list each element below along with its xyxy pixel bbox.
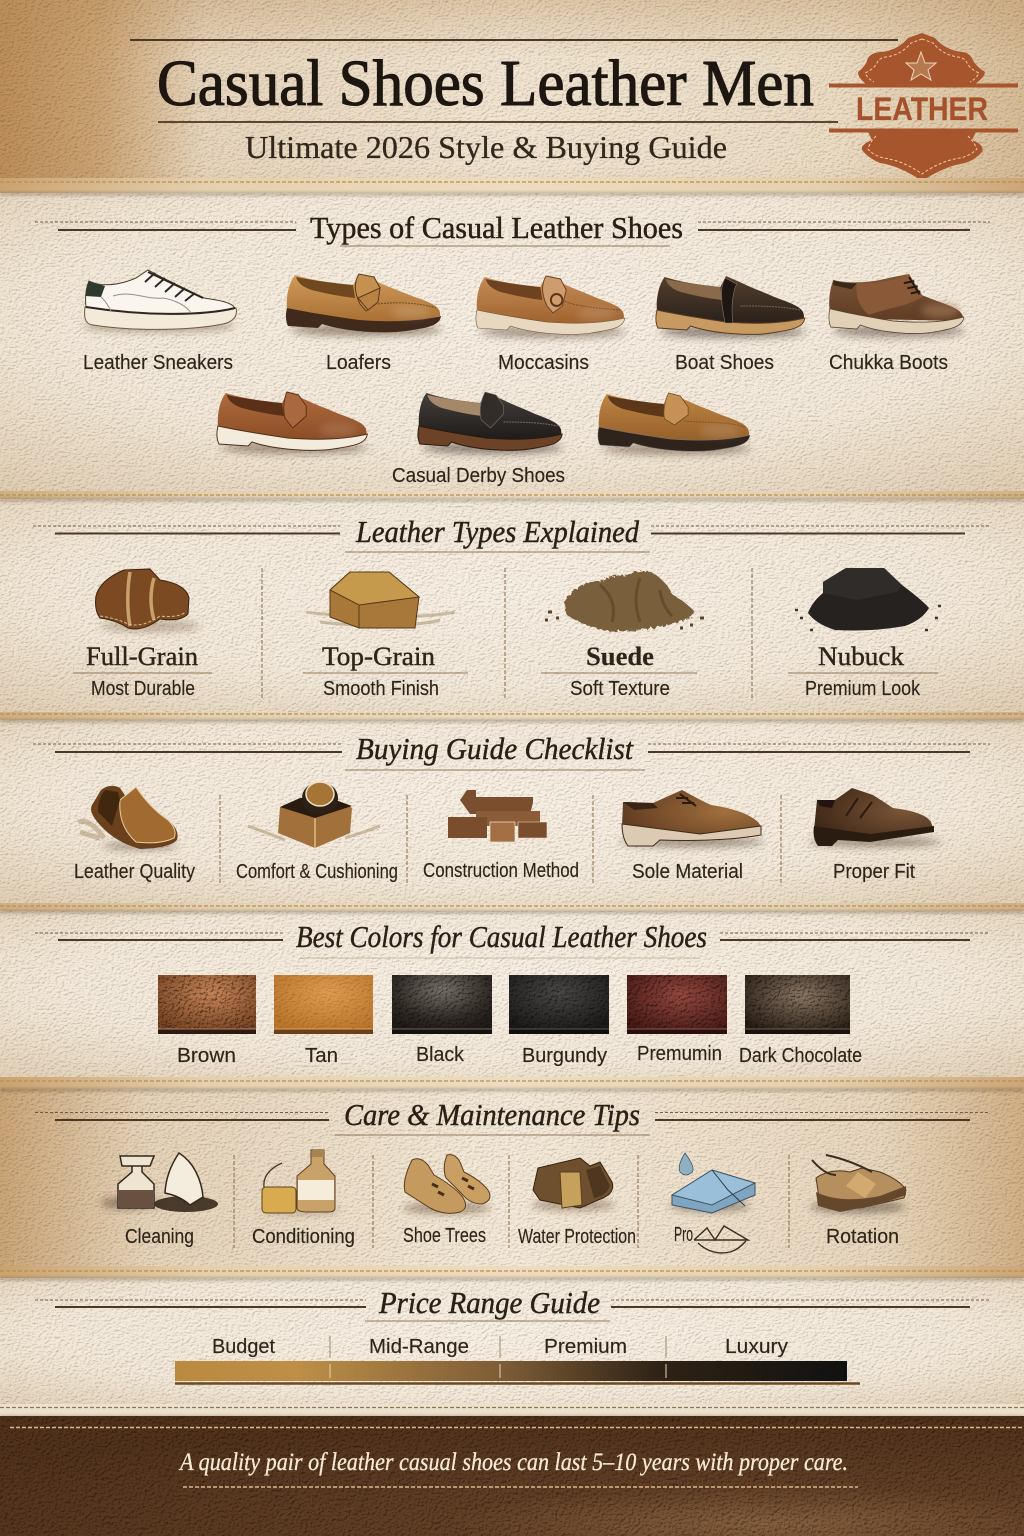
header panel [0,0,1024,194]
icon: proper fit [809,788,941,847]
label: mid-range: Mid-Range [369,1336,469,1358]
icon: protection cloth [670,1153,755,1213]
swatch: brown [158,975,256,1034]
icon: shoe trees [403,1155,491,1214]
label: conditioning: Conditioning [252,1226,355,1248]
icon: top-grain [306,572,455,628]
text: soft texture: Soft Texture [570,678,670,700]
swatch: premium (burgundy) [627,975,727,1034]
label: chukka boots: Chukka Boots [829,352,948,374]
shoe: brown slip-on [217,392,368,454]
shoe: black loafer [418,392,563,454]
heading: leather types: Leather Types Explained [355,514,639,549]
panel: types of casual leather shoes [0,193,1024,499]
label: moccasins: Moccasins [498,352,589,374]
panel: best colors [0,912,1024,1090]
panel: footer note [0,1416,1024,1536]
icon: sole material [620,790,764,847]
heading: types: Types of Casual Leather Shoes [310,210,683,245]
label: leather quality: Leather Quality [74,861,195,883]
text: smooth finish: Smooth Finish [323,678,439,700]
label: casual derby shoes: Casual Derby Shoes [392,465,565,487]
swatch: tan [274,975,373,1034]
icon: water protection [531,1158,615,1211]
label: rotation: Rotation [826,1226,899,1248]
swatch: dark chocolate [745,975,850,1034]
label: boat shoes: Boat Shoes [675,352,774,374]
icon: cleaning [100,1153,218,1212]
label: dark chocolate: Dark Chocolate [739,1045,862,1067]
label: budget: Budget [212,1336,275,1358]
shoe: casual derby [598,393,751,455]
label: loafers: Loafers [326,352,391,374]
swatch: burgundy (charcoal) [509,975,609,1034]
label: shoe trees: Shoe Trees [403,1225,486,1247]
label: premumin: Premumin [637,1043,722,1065]
label: construction method: Construction Method [423,860,579,882]
swatch: black [392,975,492,1034]
label: comfort and cushioning: Comfort & Cushioning [236,861,398,883]
shoe: moccasins [476,276,626,338]
label: water protection: Water Protection [518,1226,636,1248]
heading: care: Care & Maintenance Tips [344,1097,640,1132]
label: sole material: Sole Material [632,861,743,883]
icon: comfort and cushioning [248,782,380,848]
label: top-grain: Top-Grain [322,642,435,671]
label: luxury: Luxury [725,1336,788,1358]
icon: nubuck [795,568,941,630]
heading: buying guide: Buying Guide Checklist [356,731,634,766]
leather badge: LEATHER [856,91,988,127]
icon: full-grain [96,569,200,632]
icon: leather quality [78,786,178,850]
subtitle: Ultimate 2026 Style & Buying Guide [245,129,727,165]
shoe: boat shoes [656,276,806,338]
label: brown: Brown [177,1045,236,1067]
footer text: A quality pair of leather casual shoes can last 5–10 years with proper care. [178,1449,848,1476]
label: protection garbled [674,1224,748,1253]
label: proper fit: Proper Fit [833,861,915,883]
label: premium: Premium [544,1336,627,1358]
panel: price range guide [0,1278,1024,1418]
shoe: leather sneakers [83,270,236,332]
label: suede: Suede [586,642,654,671]
icon: conditioning [260,1150,340,1215]
label: full-grain: Full-Grain [86,642,198,671]
label: leather sneakers: Leather Sneakers [83,352,233,374]
shoe: loafers [286,274,442,336]
panel: buying guide checklist [0,721,1024,912]
heading: price range: Price Range Guide [378,1285,600,1320]
panel: leather types explained [0,499,1024,721]
text: premium look: Premium Look [805,678,921,700]
icon: suede [545,571,704,631]
text: most durable: Most Durable [91,678,195,700]
icon: construction method [448,790,547,842]
leather badge [829,33,1018,181]
label: nubuck: Nubuck [818,642,904,671]
label: tan: Tan [305,1045,338,1067]
panel: care and maintenance [0,1089,1024,1279]
price gradient bar [175,1336,860,1384]
title: Casual Shoes Leather Men [157,47,814,120]
label: burgundy: Burgundy [522,1045,607,1067]
label: black: Black [416,1044,465,1066]
label: cleaning: Cleaning [125,1226,194,1248]
label: protection garbled: Pro [674,1224,693,1246]
heading: best colors: Best Colors for Casual Leather Shoes [296,919,707,954]
icon: rotation [810,1155,906,1213]
shoe: chukka boots [829,274,965,337]
